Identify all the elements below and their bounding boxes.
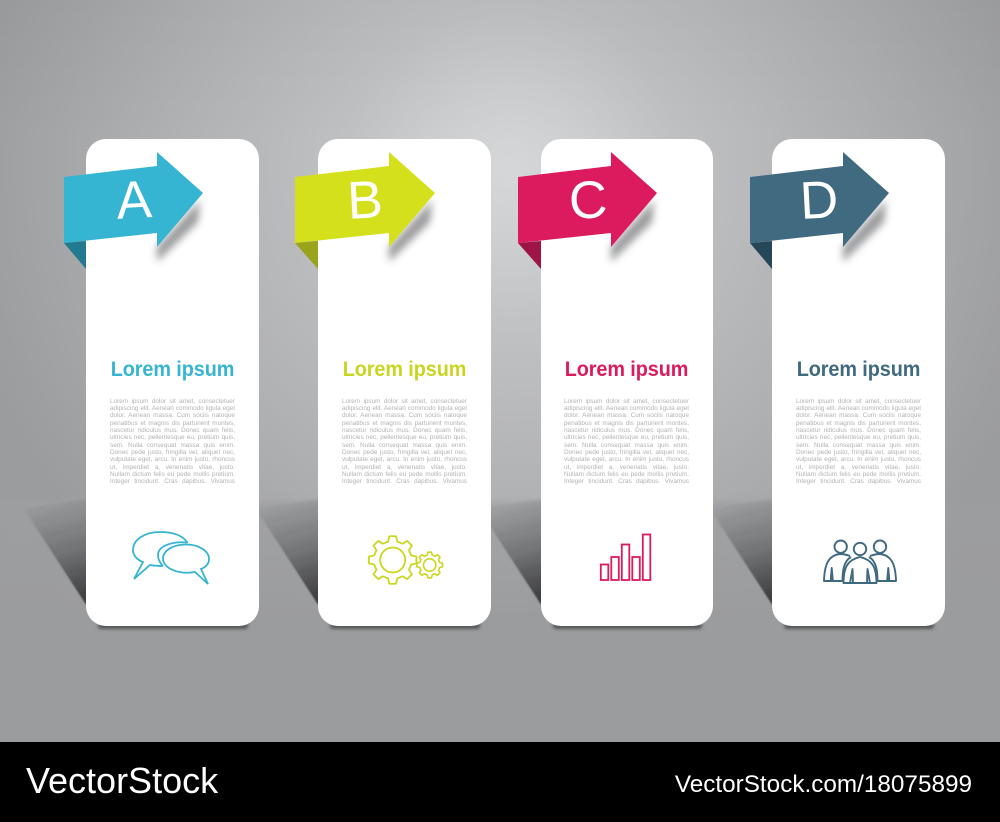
card C with ribbon [518, 139, 713, 629]
text block: column A: Nullam dictum felis eu pede mollis pretium. [110, 471, 235, 478]
text block: column B: ut, imperdiet a, venenatis vitae, justo. [342, 464, 467, 471]
text block: column B: adipiscing elit. Aenean commodo ligula eget [342, 405, 467, 412]
text block: column C: sem. Nulla consequat massa quis enim. [564, 442, 689, 449]
floor shadows behind cards [24, 499, 778, 612]
text block: column B: dolor. Aenean massa. Cum sociis natoque [342, 412, 467, 419]
icon: bar chart [601, 534, 650, 580]
text block: column C: adipiscing elit. Aenean commodo ligula eget [564, 405, 689, 412]
icon: gears [369, 536, 443, 584]
text block: column A [110, 398, 235, 485]
icon: people [824, 540, 896, 583]
text block: column A: sem. Nulla consequat massa quis enim. [110, 442, 235, 449]
text block: column A: Donec pede justo, fringilla vel, aliquet nec, [110, 449, 235, 456]
text block: column D: Lorem ipsum dolor sit amet, consectetuer [796, 398, 921, 404]
text block: column C: nascetur ridiculus mus. Donec quam felis, [564, 427, 689, 434]
heading: column A: Lorem ipsum [111, 358, 234, 381]
text block: column A: Lorem ipsum dolor sit amet, consectetuer [110, 398, 235, 404]
text block: column C: dolor. Aenean massa. Cum sociis natoque [564, 412, 689, 419]
heading: column B: Lorem ipsum [343, 358, 466, 381]
text block: column B: Nullam dictum felis eu pede mollis pretium. [342, 471, 467, 478]
text block: column B: ultricies nec, pellentesque eu, pretium quis, [342, 434, 467, 441]
text block: column D: penatibus et magnis dis parturient montes, [796, 420, 921, 427]
card D with ribbon: D [798, 170, 840, 231]
text block: column B: sem. Nulla consequat massa quis enim. [342, 442, 467, 449]
text block: column C: ultricies nec, pellentesque eu, pretium quis, [564, 434, 689, 441]
footer image id: VectorStock.com/18075899 [675, 771, 972, 798]
text block: column B: Donec pede justo, fringilla vel, aliquet nec, [342, 449, 467, 456]
card B with ribbon: B [346, 170, 384, 231]
text block: column D: Nullam dictum felis eu pede mollis pretium. [796, 471, 921, 478]
card A with ribbon [64, 139, 259, 629]
text block: column B: nascetur ridiculus mus. Donec quam felis, [342, 427, 467, 434]
text block: column A: adipiscing elit. Aenean commodo ligula eget [110, 405, 235, 412]
text block: column C: Lorem ipsum dolor sit amet, consectetuer [564, 398, 689, 404]
text block: column D: ut, imperdiet a, venenatis vitae, justo. [796, 464, 921, 471]
text block: column B: Integer tincidunt. Cras dapibus. Vivamus [342, 478, 467, 485]
text block: column C: Integer tincidunt. Cras dapibus. Vivamus [564, 478, 689, 485]
text block: column C: ut, imperdiet a, venenatis vitae, justo. [564, 464, 689, 471]
text block: column B: Lorem ipsum dolor sit amet, consectetuer [342, 398, 467, 404]
card D with ribbon [750, 139, 945, 629]
text block: column C: Donec pede justo, fringilla vel, aliquet nec, [564, 449, 689, 456]
text block: column B: vulputate eget, arcu. In enim justo, rhoncus [342, 456, 467, 463]
text block: column A: Integer tincidunt. Cras dapibus. Vivamus [110, 478, 235, 485]
text block: column C [564, 398, 689, 485]
icon: speech bubbles [133, 532, 209, 584]
text block: column B [342, 398, 467, 485]
text block: column D: sem. Nulla consequat massa quis enim. [796, 442, 921, 449]
heading: column C: Lorem ipsum [565, 358, 688, 381]
text block: column A: penatibus et magnis dis parturient montes, [110, 420, 235, 427]
text block: column D: nascetur ridiculus mus. Donec quam felis, [796, 427, 921, 434]
card B with ribbon [295, 139, 491, 629]
footer band [0, 742, 1000, 822]
text block: column A: ut, imperdiet a, venenatis vitae, justo. [110, 464, 235, 471]
text block: column D: dolor. Aenean massa. Cum sociis natoque [796, 412, 921, 419]
heading: column D: Lorem ipsum [797, 358, 920, 381]
text block: column D: vulputate eget, arcu. In enim justo, rhoncus [796, 456, 921, 463]
text block: column C: penatibus et magnis dis parturient montes, [564, 420, 689, 427]
card A with ribbon: A [115, 170, 154, 231]
text block: column C: Nullam dictum felis eu pede mollis pretium. [564, 471, 689, 478]
footer logo text: VectorStock [26, 760, 218, 801]
text block: column B: penatibus et magnis dis parturient montes, [342, 420, 467, 427]
text block: column A: dolor. Aenean massa. Cum sociis natoque [110, 412, 235, 419]
text block: column D [796, 398, 921, 485]
text block: column A: ultricies nec, pellentesque eu, pretium quis, [110, 434, 235, 441]
text block: column D: Donec pede justo, fringilla vel, aliquet nec, [796, 449, 921, 456]
text block: column D: ultricies nec, pellentesque eu, pretium quis, [796, 434, 921, 441]
text block: column D: adipiscing elit. Aenean commodo ligula eget [796, 405, 921, 412]
card C with ribbon: C [567, 170, 609, 231]
text block: column D: Integer tincidunt. Cras dapibus. Vivamus [796, 478, 921, 485]
text block: column A: nascetur ridiculus mus. Donec quam felis, [110, 427, 235, 434]
text block: column C: vulputate eget, arcu. In enim justo, rhoncus [564, 456, 689, 463]
text block: column A: vulputate eget, arcu. In enim justo, rhoncus [110, 456, 235, 463]
